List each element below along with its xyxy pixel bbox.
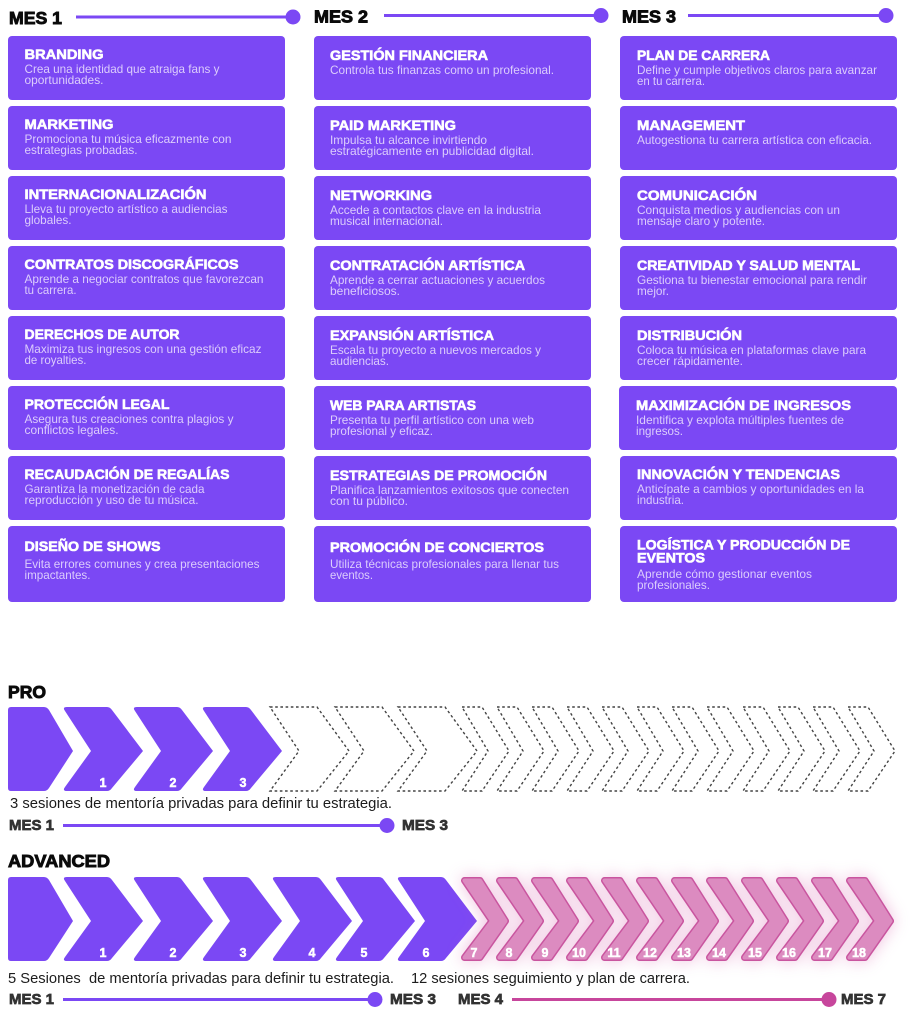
card: Networking: Accede a contactos clave en la industria	[330, 203, 541, 217]
text: ADVANCED mentoring description: 5 Sesiones de mentoría privadas para definir tu estrategia.	[8, 970, 394, 987]
card: Protección legal: Asegura tus creaciones contra plagios y	[24, 412, 234, 426]
card: Plan de carrera: en tu carrera.	[637, 74, 705, 88]
card: Estrategias de promoción: ESTRATEGIAS DE PROMOCIÓN	[330, 466, 547, 483]
card: Networking: NETWORKING	[330, 187, 432, 203]
card: Comunicación: mensaje claro y potente.	[637, 214, 765, 228]
card: Web para artistas	[314, 386, 591, 450]
card: Branding: oportunidades.	[24, 73, 104, 87]
card: Innovación y tendencias	[620, 456, 897, 520]
chart: ADVANCED follow-up chevrons: 17	[818, 946, 832, 960]
card: Distribución	[620, 316, 897, 380]
chart: ADVANCED follow-up chevrons: 9	[542, 946, 549, 960]
card: Paid marketing: estratégicamente en publicidad digital.	[330, 144, 534, 158]
card: Maximización de ingresos: Identifica y explota múltiples fuentes de	[636, 413, 844, 427]
card: Contratos discográficos: Aprende a negociar contratos que favorezcan	[24, 272, 264, 286]
card: Derechos de autor	[8, 316, 285, 380]
card: Protección legal: conflictos legales.	[24, 423, 118, 437]
card: Derechos de autor: Maximiza tus ingresos con una gestión eficaz	[24, 342, 262, 356]
card: Innovación y tendencias: industria.	[637, 493, 684, 507]
card: Maximización de ingresos	[619, 386, 897, 450]
card: Creatividad y salud mental: CREATIVIDAD Y SALUD MENTAL	[637, 257, 860, 273]
card: Diseño de shows: Evita errores comunes y crea presentaciones	[24, 557, 260, 571]
card: Internacionalización: Lleva tu proyecto artístico a audiencias	[24, 202, 228, 216]
card: Distribución: crecer rápidamente.	[637, 354, 743, 368]
card: Web para artistas: Presenta tu perfil artístico con una web	[330, 413, 534, 427]
card: Expansión artística: Escala tu proyecto a nuevos mercados y	[330, 343, 541, 357]
header: MES 1 timeline	[9, 8, 300, 28]
timeline: ADVANCED months 4 to 7: MES 7	[841, 991, 886, 1008]
card: Branding: Crea una identidad que atraiga fans y	[24, 62, 220, 76]
chart: ADVANCED follow-up chevrons: 14	[712, 946, 726, 960]
card: Management	[620, 106, 897, 170]
card: Contratación artística	[314, 246, 591, 310]
card: Expansión artística: EXPANSIÓN ARTÍSTICA	[330, 326, 494, 343]
card: Plan de carrera	[620, 36, 897, 100]
card: Expansión artística: audiencias.	[330, 354, 389, 368]
card: Creatividad y salud mental: Gestiona tu bienestar emocional para rendir	[637, 273, 867, 287]
card: Internacionalización: INTERNACIONALIZACIÓN	[24, 185, 206, 202]
card: Creatividad y salud mental	[620, 246, 897, 310]
card: Distribución: Coloca tu música en plataformas clave para	[637, 343, 866, 357]
timeline: ADVANCED months 1 to 3	[9, 991, 436, 1008]
card: Marketing: Promociona tu música eficazmente con	[24, 132, 232, 146]
timeline: ADVANCED months 1 to 3: MES 3	[390, 991, 436, 1008]
heading: PRO: PRO	[8, 682, 46, 702]
card: Internacionalización	[8, 176, 285, 240]
card: Distribución: DISTRIBUCIÓN	[637, 326, 742, 343]
card: Recaudación de regalías: reproducción y uso de tu música.	[24, 493, 198, 507]
chart: ADVANCED follow-up chevrons: 8	[506, 946, 513, 960]
card: Gestión financiera: GESTIÓN FINANCIERA	[330, 46, 488, 63]
chart: ADVANCED follow-up chevrons	[464, 880, 890, 960]
card: Contratos discográficos: CONTRATOS DISCOGRÁFICOS	[24, 256, 238, 272]
card: Comunicación	[620, 176, 897, 240]
chart: PRO session chevrons: 3	[240, 776, 247, 790]
card: Comunicación: COMUNICACIÓN	[637, 186, 757, 203]
chart: ADVANCED mentoring chevrons: 5	[361, 946, 368, 960]
timeline: PRO months	[9, 817, 448, 834]
card: Marketing	[8, 106, 285, 170]
card: Estrategias de promoción: Planifica lanzamientos exitosos que conecten	[330, 483, 569, 497]
card: Contratación artística: beneficiosos.	[330, 284, 400, 298]
card: Marketing: estrategias probadas.	[24, 143, 138, 157]
card: Paid marketing: Impulsa tu alcance invirtiendo	[330, 133, 487, 147]
header: MES 2 timeline	[314, 6, 608, 26]
heading: ADVANCED: ADVANCED	[8, 851, 110, 871]
chart: ADVANCED mentoring chevrons: 1	[100, 946, 107, 960]
card: Logística y producción de eventos: profesionales.	[637, 578, 710, 592]
card: Internacionalización: globales.	[24, 213, 72, 227]
card: Contratación artística: CONTRATACIÓN ARTÍSTICA	[330, 256, 525, 273]
card: Recaudación de regalías: RECAUDACIÓN DE REGALÍAS	[24, 465, 230, 482]
chart: ADVANCED mentoring chevrons: 4	[309, 946, 316, 960]
card: Branding: BRANDING	[24, 46, 104, 62]
chart: ADVANCED mentoring chevrons: 2	[170, 946, 177, 960]
card: Recaudación de regalías: Garantiza la monetización de cada	[24, 482, 205, 496]
chart: ADVANCED follow-up chevrons: 7	[471, 946, 478, 960]
header: MES 1 timeline: MES 1	[9, 8, 62, 28]
text: ADVANCED follow-up description: 12 sesiones seguimiento y plan de carrera.	[411, 970, 690, 987]
text: PRO description: 3 sesiones de mentoría privadas para definir tu estrategia.	[10, 795, 392, 812]
chart: ADVANCED mentoring chevrons: 3	[240, 946, 247, 960]
chart: ADVANCED follow-up chevrons: 13	[677, 946, 691, 960]
card: Diseño de shows: impactantes.	[24, 568, 90, 582]
card: Promoción de conciertos: Utiliza técnicas profesionales para llenar tus	[330, 557, 559, 571]
card: Logística y producción de eventos	[620, 526, 897, 602]
chart: ADVANCED follow-up chevrons: 10	[572, 946, 586, 960]
chart: PRO session chevrons: 2	[170, 776, 177, 790]
header: MES 2 timeline: MES 2	[314, 6, 368, 26]
card: Paid marketing	[314, 106, 591, 170]
card: Networking: musical internacional.	[330, 214, 443, 228]
chart: ADVANCED mentoring chevrons	[8, 877, 477, 961]
card: Maximización de ingresos: ingresos.	[636, 424, 683, 438]
card: Web para artistas: profesional y eficaz.	[330, 424, 433, 438]
card: Contratos discográficos	[8, 246, 285, 310]
card: Estrategias de promoción	[314, 456, 591, 520]
timeline: ADVANCED months 1 to 3: MES 1	[9, 991, 54, 1008]
card: Promoción de conciertos: PROMOCIÓN DE CONCIERTOS	[330, 538, 544, 555]
card: Derechos de autor: de royalties.	[24, 353, 86, 367]
card: Diseño de shows	[8, 526, 285, 602]
card: Gestión financiera	[314, 36, 591, 100]
card: Derechos de autor: DERECHOS DE AUTOR	[24, 326, 180, 342]
card: Contratos discográficos: tu carrera.	[24, 283, 76, 297]
card: Networking	[314, 176, 591, 240]
card: Maximización de ingresos: MAXIMIZACIÓN DE INGRESOS	[636, 396, 851, 413]
timeline: ADVANCED months 4 to 7	[458, 991, 886, 1008]
card: Estrategias de promoción: con tu público.	[330, 494, 408, 508]
timeline: PRO months: MES 1	[9, 817, 54, 834]
card: Protección legal: PROTECCIÓN LEGAL	[24, 395, 170, 412]
card: Branding	[8, 36, 285, 100]
chart: ADVANCED follow-up chevrons: 11	[607, 946, 621, 960]
card: Promoción de conciertos	[314, 526, 591, 602]
chart: ADVANCED follow-up chevrons: 16	[782, 946, 796, 960]
chart: PRO session chevrons: 1	[100, 776, 107, 790]
card: Logística y producción de eventos: EVENTOS	[637, 550, 705, 566]
card: Creatividad y salud mental: mejor.	[637, 284, 669, 298]
card: Management: Autogestiona tu carrera artística con eficacia.	[637, 133, 872, 147]
card: Web para artistas: WEB PARA ARTISTAS	[330, 397, 476, 413]
chart: PRO session chevrons	[8, 707, 895, 791]
header: MES 3 timeline: MES 3	[622, 6, 676, 26]
card: Logística y producción de eventos: Aprende cómo gestionar eventos	[637, 567, 812, 581]
card: Diseño de shows: DISEÑO DE SHOWS	[24, 537, 160, 554]
card: Expansión artística	[314, 316, 591, 380]
timeline: ADVANCED months 4 to 7: MES 4	[458, 991, 504, 1008]
card: Contratación artística: Aprende a cerrar actuaciones y acuerdos	[330, 273, 545, 287]
card: Innovación y tendencias: Anticípate a cambios y oportunidades en la	[637, 482, 864, 496]
card: Plan de carrera: Define y cumple objetivos claros para avanzar	[637, 63, 877, 77]
card: Marketing: MARKETING	[24, 116, 114, 132]
card: Promoción de conciertos: eventos.	[330, 568, 373, 582]
chart: ADVANCED follow-up chevrons: 18	[852, 946, 866, 960]
card: Comunicación: Conquista medios y audiencias con un	[637, 203, 840, 217]
card: Recaudación de regalías	[8, 456, 285, 520]
chart: ADVANCED follow-up chevrons: 12	[643, 946, 657, 960]
chart: ADVANCED follow-up chevrons: 15	[748, 946, 762, 960]
header: MES 3 timeline	[622, 6, 894, 26]
card: Plan de carrera: PLAN DE CARRERA	[637, 47, 770, 63]
card: Protección legal	[8, 386, 285, 450]
card: Paid marketing: PAID MARKETING	[330, 117, 456, 133]
timeline: PRO months: MES 3	[402, 817, 448, 834]
card: Logística y producción de eventos: LOGÍSTICA Y PRODUCCIÓN DE	[637, 536, 850, 552]
card: Innovación y tendencias: INNOVACIÓN Y TENDENCIAS	[637, 465, 840, 482]
card: Management: MANAGEMENT	[637, 117, 745, 133]
card: Gestión financiera: Controla tus finanzas como un profesional.	[330, 63, 554, 77]
chart: ADVANCED mentoring chevrons: 6	[423, 946, 430, 960]
